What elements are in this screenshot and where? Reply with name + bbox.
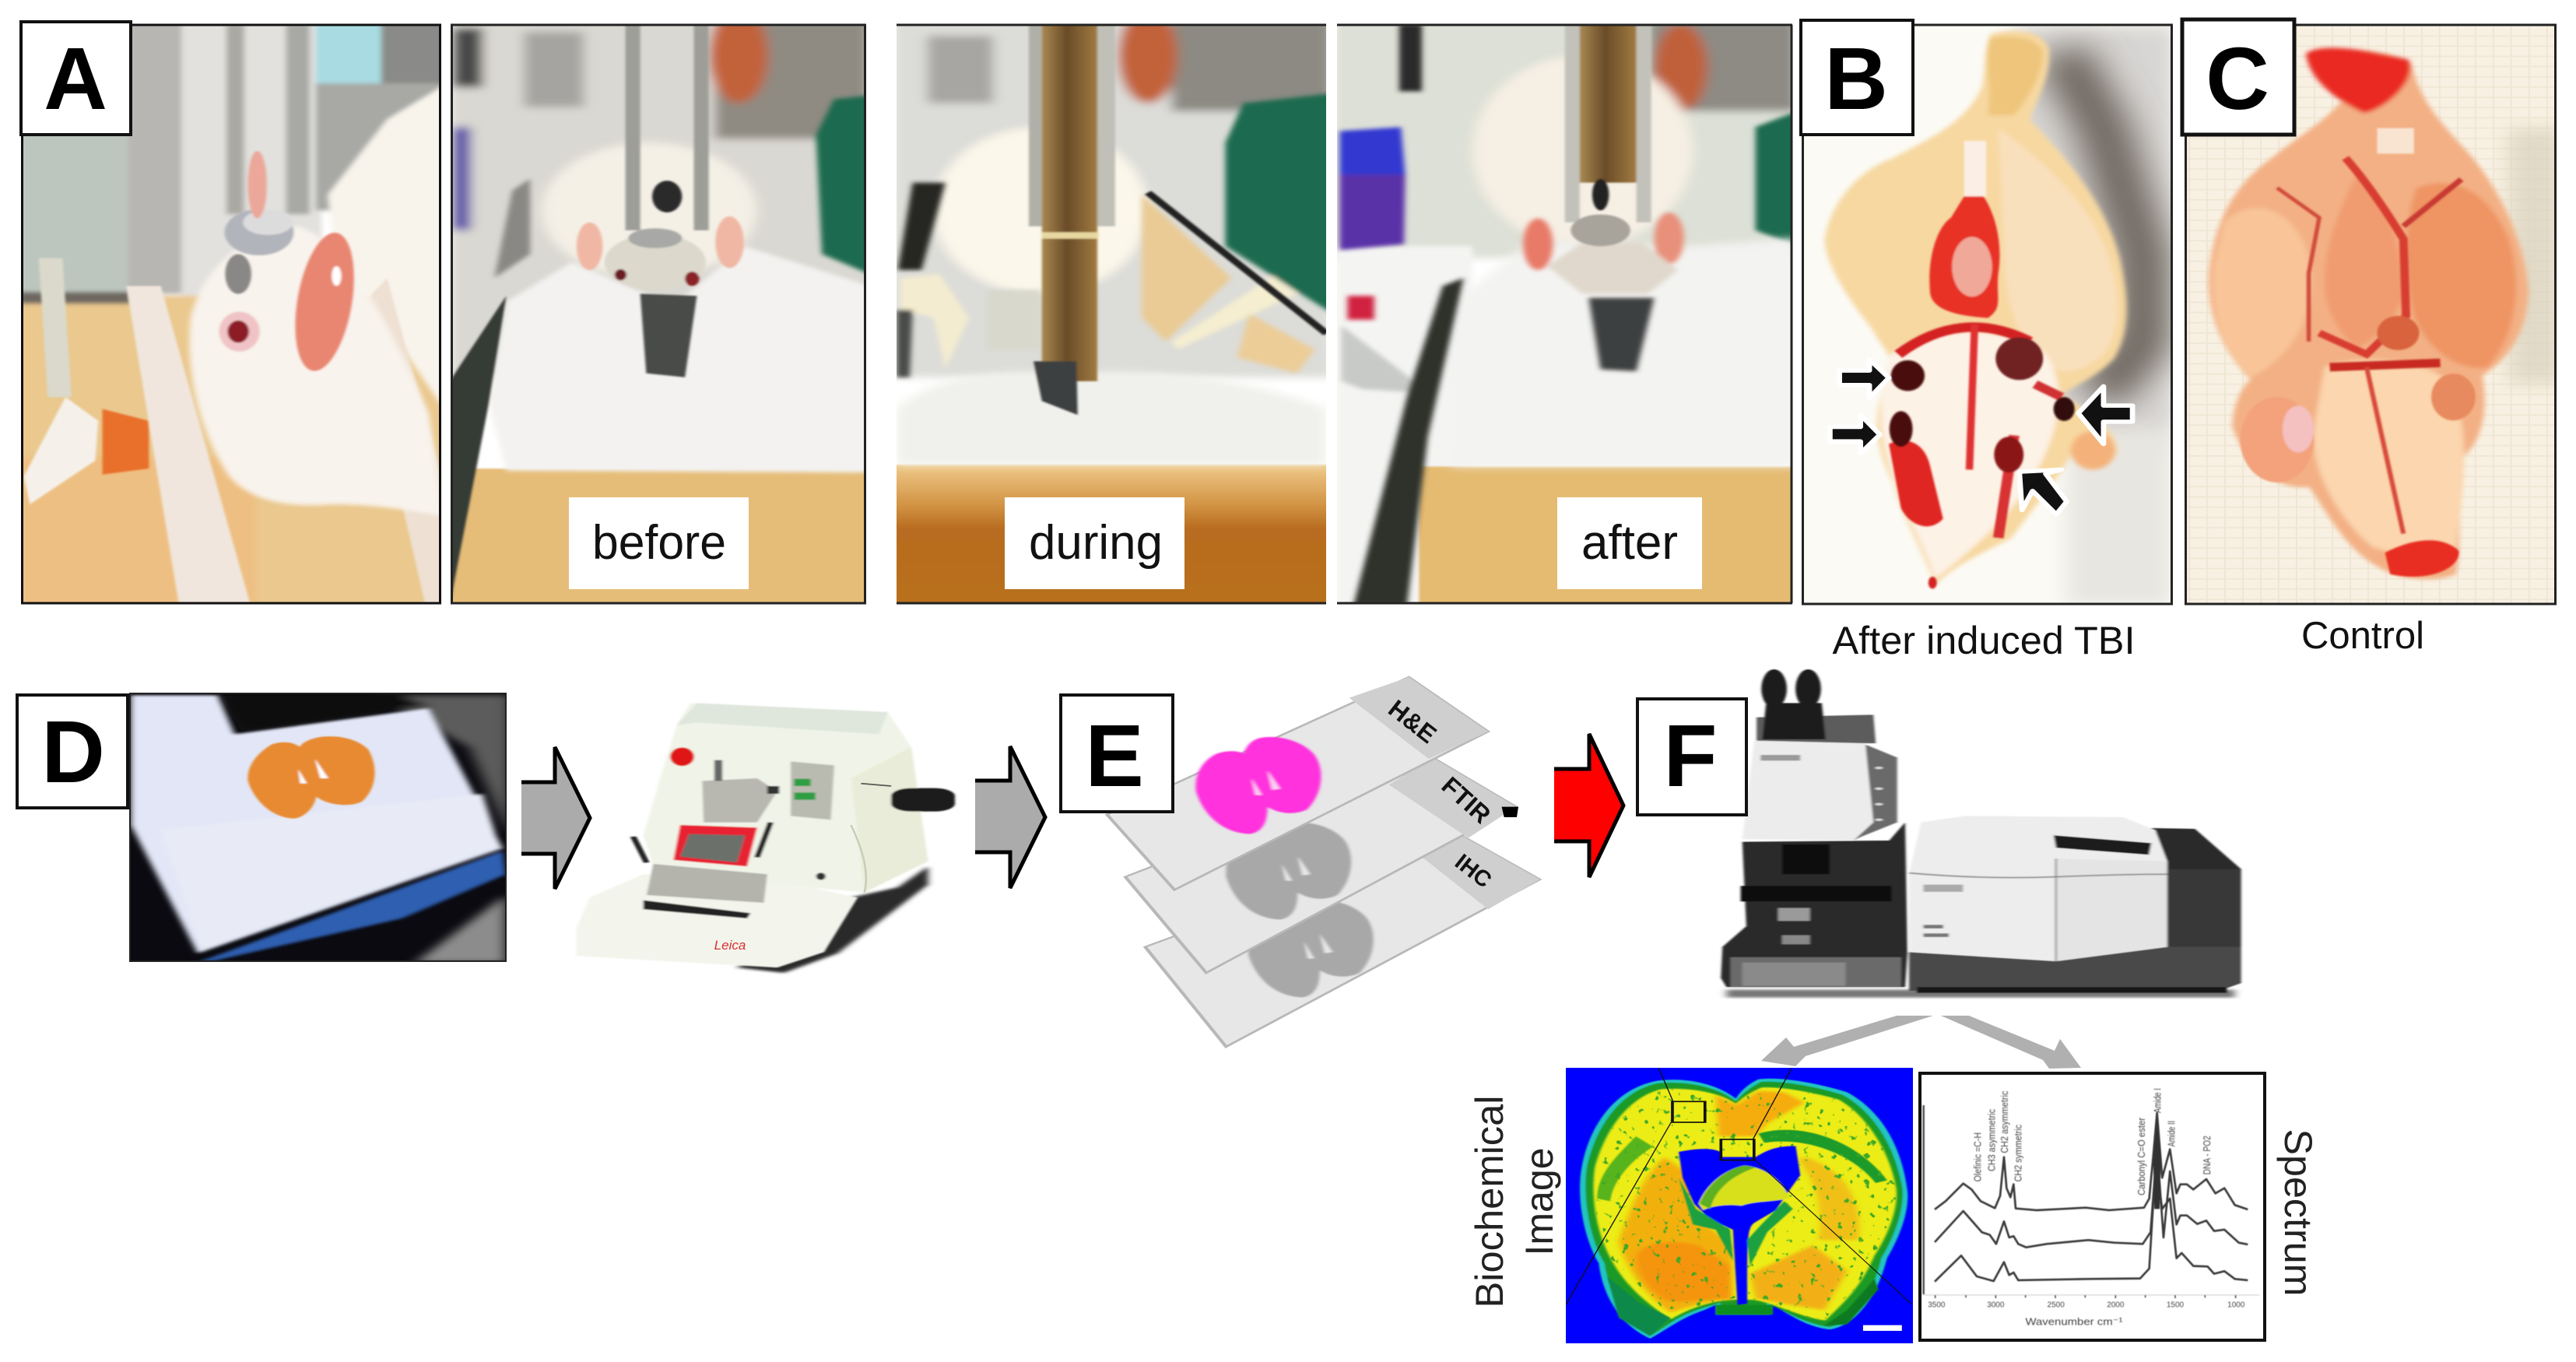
panel B: brain after induced TBI (1801, 23, 2174, 606)
label: during (1005, 497, 1184, 589)
orange regions (1619, 1157, 1733, 1313)
peak labels: CH2 asymmetric (1999, 1090, 2010, 1153)
label box B (1801, 20, 1913, 135)
arrow: microtome to slides (975, 746, 1045, 888)
axis title: Biochemical Image (1467, 1096, 1561, 1308)
label box A: A (44, 30, 107, 128)
microtome (576, 703, 955, 973)
wavenumber tick labels: 1500 (2167, 1301, 2185, 1309)
slide label: H&E: H&E (1383, 694, 1442, 749)
yellow tissue (1593, 1087, 1897, 1321)
x-axis title: Wavenumber cm⁻¹ (2025, 1316, 2123, 1328)
microtome base (576, 874, 858, 967)
peak labels: CH2 symmetric (2012, 1125, 2023, 1181)
white tape strip left (126, 286, 250, 604)
ventricle (1679, 1146, 1800, 1305)
zoom guide lines (1566, 1068, 1911, 1305)
microscope stand (1721, 823, 1907, 987)
panel A: during photo (892, 8, 1332, 608)
arrow: to spectrum (1941, 1016, 2081, 1069)
eyepieces (1761, 669, 1826, 739)
blood marks: caudal and vessels (2385, 540, 2458, 577)
slides: H&E, FTIR, IHC (1107, 677, 1540, 1047)
orange brain section (247, 736, 375, 819)
outer brain outline (1580, 1079, 1907, 1339)
rat eye (219, 312, 260, 352)
hippocampus island (1699, 1165, 1789, 1210)
FTIR spectrum chart (1924, 1088, 2259, 1328)
wavenumber tick labels: 3000 (1987, 1301, 2005, 1309)
FTIR imaging microscope and spectrometer (1721, 669, 2241, 998)
brain tissue (1825, 31, 2126, 584)
hemorrhage (1929, 184, 1999, 318)
microscope head (1742, 741, 1873, 841)
rat body (328, 83, 447, 413)
orange adaptor (103, 409, 149, 475)
caption: After induced TBI: After induced TBI (1832, 619, 2136, 662)
label: after (1557, 497, 1702, 589)
label box F: F (1663, 707, 1718, 805)
microtome body (644, 703, 928, 893)
peak labels: Amide II (2166, 1121, 2178, 1146)
wavenumber tick labels (1928, 1301, 2245, 1309)
tray side (198, 851, 506, 964)
label box C (2182, 19, 2294, 135)
label box D: D (41, 703, 105, 801)
scale bar (1863, 1325, 1902, 1331)
label: after: after (1581, 516, 1678, 570)
label: before: before (592, 516, 726, 570)
spectrum box (1920, 1073, 2265, 1340)
biochemical FTIR brain image (1562, 1066, 1915, 1345)
label box D (17, 695, 128, 808)
spectrum traces (1935, 1113, 2248, 1282)
slide label: IHC: IHC (1450, 850, 1496, 893)
slide label: FTIR: FTIR (1437, 771, 1496, 829)
label box C: C (2206, 30, 2269, 128)
anaesthesia tube (39, 258, 72, 397)
label box B: B (1824, 30, 1888, 128)
axis title: Spectrum: Spectrum (2276, 1129, 2320, 1297)
brain tissue (2209, 49, 2529, 579)
panel A: before photo (450, 8, 872, 608)
regions of interest (1672, 1101, 1754, 1160)
arrows pointing to lesions (1830, 360, 2132, 514)
panel C: control brain (2182, 23, 2561, 606)
peak labels: Amide I (2152, 1088, 2164, 1113)
blood marks: rostral and caudal (2306, 48, 2410, 113)
red arrow: slides to FTIR microscope (1554, 734, 1623, 877)
wavenumber tick labels: 2500 (2048, 1301, 2065, 1309)
spectrometer window (2054, 835, 2151, 855)
spectrum axes (1924, 1105, 2259, 1298)
peak labels (1972, 1088, 2213, 1195)
label: before (569, 497, 749, 589)
wavenumber tick labels: 3500 (1928, 1301, 1946, 1309)
axis title: Biochemical Image: Biochemical (1467, 1096, 1511, 1308)
peak labels: CH3 asymmetric (1985, 1109, 1997, 1171)
label box A (21, 22, 131, 135)
rat head (189, 226, 444, 516)
microscope rear box (1757, 714, 1876, 743)
label box E (1061, 695, 1173, 812)
spectrometer rear housing (2151, 828, 2241, 983)
white tape strip right (370, 279, 439, 602)
fur marks (225, 254, 251, 294)
tissue speckle (1593, 1087, 1897, 1321)
caption: Control: Control (2301, 615, 2424, 657)
label box F (1637, 699, 1746, 815)
peak labels: Carbonyl C=O ester (2136, 1118, 2147, 1195)
label box E: E (1085, 707, 1144, 805)
wavenumber tick labels: 2000 (2107, 1301, 2125, 1309)
spectrometer base (1909, 947, 2241, 991)
wavenumber tick labels: 1000 (2227, 1301, 2245, 1309)
slide FTIR (1125, 757, 1518, 973)
slide IHC (1145, 833, 1540, 1047)
label: during: during (1029, 516, 1163, 570)
panel A: rat under anesthesia photo (18, 20, 447, 609)
peak labels: Olefinic =C-H (1972, 1132, 1984, 1181)
arrow: to biochemical image (1761, 1016, 1933, 1066)
slide H&E (1107, 677, 1488, 890)
microtome logo: Leica (714, 938, 746, 953)
axis title: Biochemical Image: Image (1517, 1147, 1561, 1256)
white block (131, 695, 503, 953)
peak labels: DNA - PO2 (2201, 1136, 2213, 1174)
spectrometer housing (1909, 816, 2167, 961)
rat ear (293, 232, 356, 372)
arrow: block to microtome (521, 747, 590, 889)
green band (1759, 1130, 1887, 1183)
metal ring (225, 209, 293, 255)
panel D: paraffin block photo (128, 693, 509, 964)
pink tail (247, 151, 267, 219)
panel A: after photo (1332, 20, 1800, 612)
